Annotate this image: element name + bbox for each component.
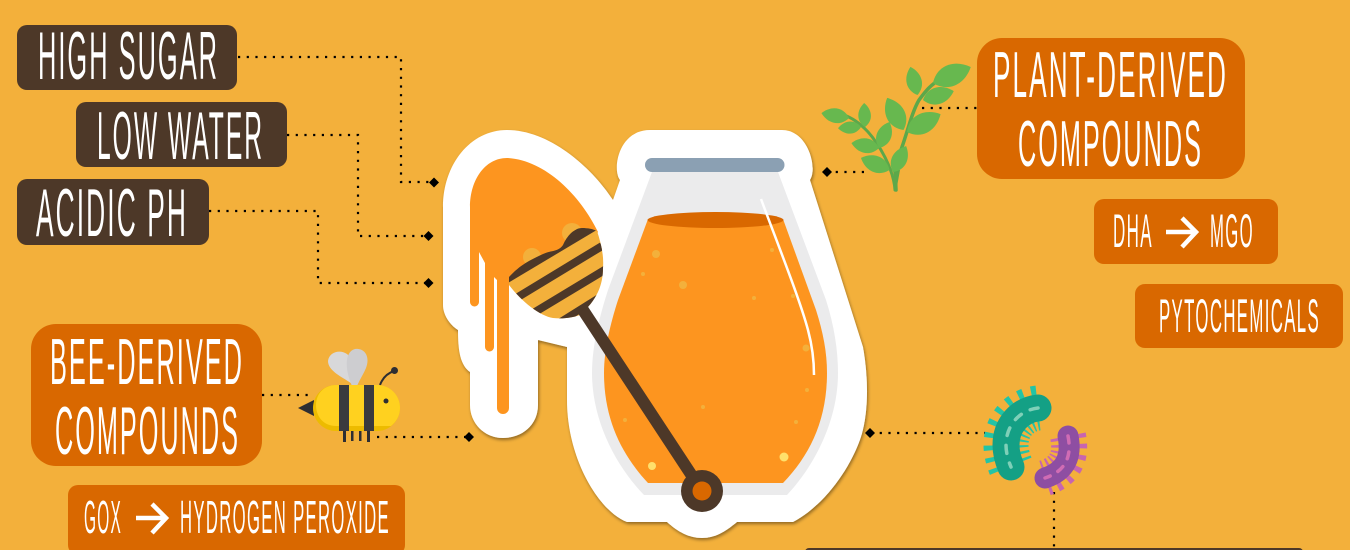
- box: gox to hydrogen peroxide: GOX: [84, 491, 122, 543]
- connector: low water: [287, 135, 434, 241]
- text: LOW WATER: [97, 98, 264, 174]
- jar glass: [592, 172, 838, 495]
- box: high sugar: [17, 18, 237, 94]
- text: HYDROGEN PEROXIDE: [180, 491, 390, 543]
- connector: bacteria: [865, 428, 1054, 548]
- box: plant-derived compounds: [977, 38, 1245, 180]
- icon: honey jar and dipper: [443, 130, 867, 538]
- box: gox to hydrogen peroxide: [68, 485, 405, 550]
- connector: high sugar: [238, 57, 439, 188]
- bubbles: [623, 248, 810, 470]
- box: acidic ph: [17, 175, 209, 251]
- box: dha to mgo: DHA: [1113, 204, 1153, 257]
- dipper handle: [583, 310, 702, 491]
- jar highlight: [761, 199, 814, 375]
- box: dha to mgo: MGO: [1210, 204, 1254, 257]
- icon: bee: [298, 349, 400, 442]
- box: low water: [76, 98, 287, 174]
- box: bottom brown panel: [805, 548, 1303, 550]
- dipper bumps: [523, 223, 582, 266]
- box: bee-derived compounds: [31, 324, 262, 469]
- text: COMPOUNDS: [55, 393, 240, 469]
- text: HIGH SUGAR: [38, 18, 219, 94]
- honey dipper head: [509, 228, 604, 318]
- dipper ring: [681, 470, 723, 512]
- connector: bee to spoon: [262, 395, 474, 442]
- honey on spoon: [470, 158, 598, 414]
- sticker outline: [443, 130, 867, 538]
- jar lid: [645, 158, 784, 172]
- bee wings: [328, 349, 368, 386]
- icon: plant sprig: [820, 57, 975, 192]
- text: ACIDIC PH: [36, 175, 188, 251]
- connector: acidic ph: [209, 211, 434, 288]
- text: BEE-DERIVED: [50, 325, 244, 398]
- box: dha to mgo: [1094, 199, 1278, 264]
- connector: plant to jar: [822, 108, 977, 177]
- teal bacterium: [1006, 408, 1038, 467]
- honey in jar: [604, 219, 827, 483]
- honey surface: [648, 212, 784, 228]
- icon: bacteria: [1006, 408, 1069, 478]
- purple bacterium: [1045, 436, 1069, 478]
